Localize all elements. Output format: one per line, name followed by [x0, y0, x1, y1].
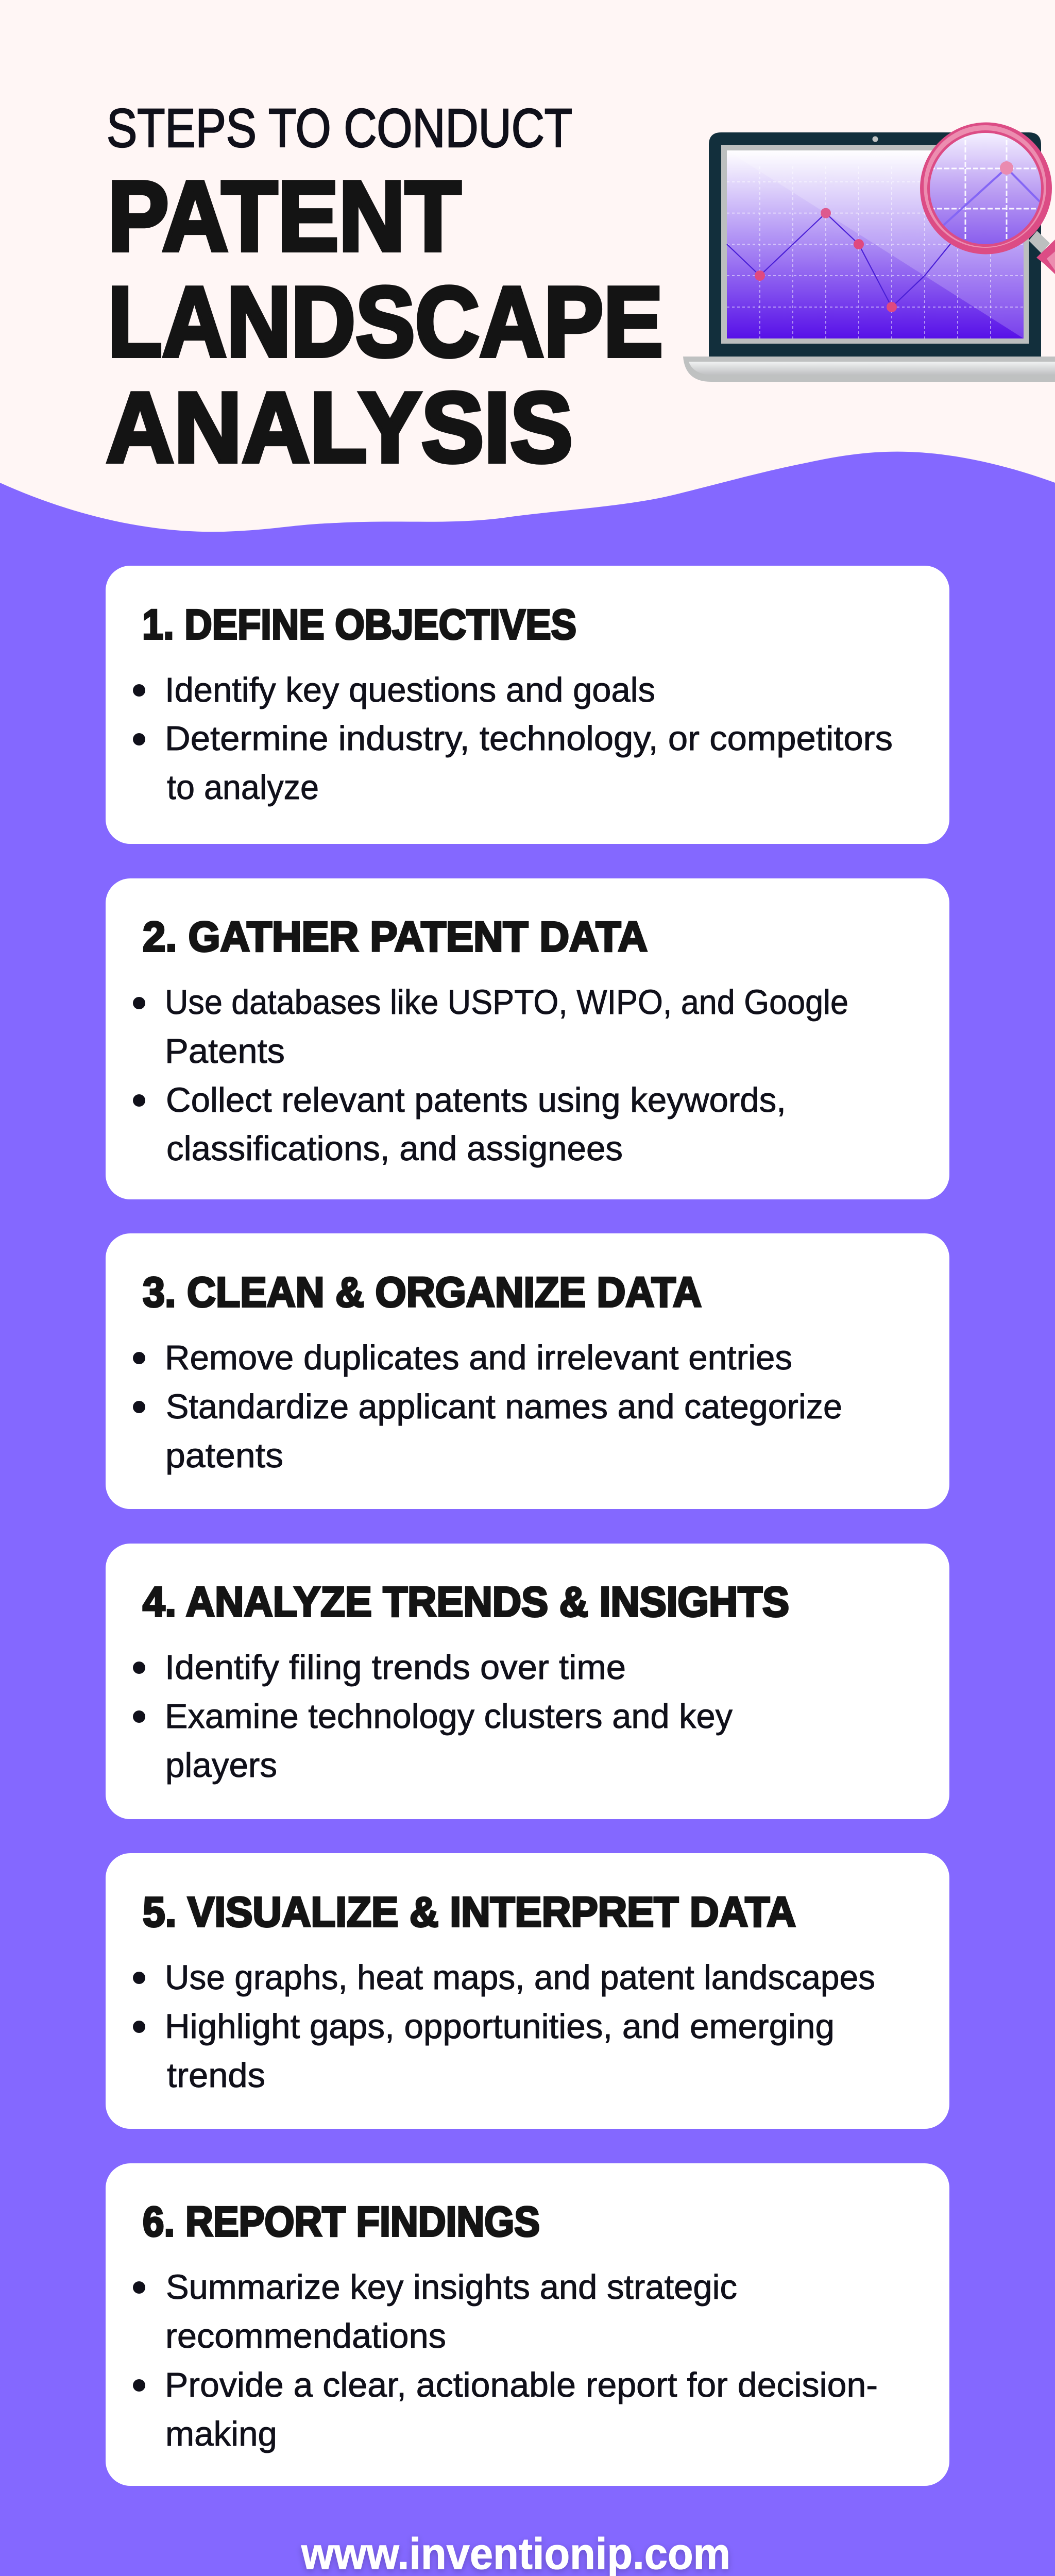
title line 2: LANDSCAPE	[108, 266, 663, 377]
panel: step 5	[106, 1853, 949, 2129]
bullet 2	[133, 719, 893, 807]
panel: step 6	[106, 2163, 949, 2486]
panel: step 3	[106, 1233, 949, 1509]
title block	[106, 98, 663, 483]
bullet 2: trends	[167, 2056, 265, 2095]
card background	[106, 1853, 949, 2129]
panel: step 2	[106, 878, 949, 1199]
bullet 2: players	[165, 1746, 277, 1785]
bullet 2	[133, 1081, 786, 1168]
bullet 2	[133, 2007, 835, 2095]
bullet 1: Identify filing trends over time	[165, 1648, 626, 1687]
bullet 1: Patents	[165, 1032, 285, 1071]
title line 1: PATENT	[108, 160, 461, 272]
bullet 1	[133, 983, 848, 1071]
screen frame	[721, 145, 1029, 344]
bullet 2: Standardize applicant names and categorize	[166, 1387, 842, 1426]
bullet 1: recommendations	[165, 2317, 446, 2355]
card background	[106, 1544, 949, 1819]
laptop body	[709, 132, 1041, 357]
card background	[106, 878, 949, 1199]
bullet 2: Examine technology clusters and key	[165, 1697, 733, 1736]
webcam	[873, 136, 878, 142]
heading: 6. REPORT FINDINGS	[143, 2198, 540, 2245]
bullet 1: Identify key questions and goals	[165, 671, 655, 709]
card background	[106, 2163, 949, 2486]
bullet 2: Highlight gaps, opportunities, and emerging	[165, 2007, 835, 2046]
bullet 2	[133, 1697, 733, 1785]
panel: step 4	[106, 1544, 949, 1819]
bullet 1: Use databases like USPTO, WIPO, and Google	[165, 983, 848, 1022]
title line 3: ANALYSIS	[106, 371, 573, 483]
bullet 2: to analyze	[167, 768, 319, 807]
bullet 2: classifications, and assignees	[166, 1129, 623, 1168]
bullet 2: Determine industry, technology, or competitors	[165, 719, 893, 758]
laptop base	[683, 357, 1055, 382]
heading: 4. ANALYZE TRENDS & INSIGHTS	[143, 1579, 789, 1625]
magnifier lens	[920, 123, 1052, 255]
heading: 1. DEFINE OBJECTIVES	[142, 601, 576, 648]
screen	[727, 150, 1024, 338]
bullet 2: Provide a clear, actionable report for decision-	[165, 2366, 878, 2404]
bullet 2	[133, 2366, 878, 2453]
bullet 2: Collect relevant patents using keywords,	[166, 1081, 786, 1120]
bullet 1	[133, 2268, 737, 2355]
panel: step 1	[106, 566, 949, 844]
heading: 2. GATHER PATENT DATA	[143, 913, 648, 960]
line chart	[727, 150, 1024, 338]
bullet 1: Summarize key insights and strategic	[166, 2268, 737, 2307]
heading: 3. CLEAN & ORGANIZE DATA	[143, 1269, 702, 1316]
bullet 2: making	[165, 2415, 277, 2453]
bullet 2	[133, 1387, 842, 1475]
subtitle: STEPS TO CONDUCT	[107, 98, 572, 159]
bullet 1: Remove duplicates and irrelevant entries	[165, 1338, 792, 1377]
icon: laptop with line chart and magnifying glass	[683, 123, 1055, 382]
magnifier handle	[1029, 231, 1055, 274]
heading: 5. VISUALIZE & INTERPRET DATA	[143, 1889, 796, 1936]
bullet 2: patents	[165, 1436, 283, 1475]
card background	[106, 1233, 949, 1509]
card background	[106, 566, 949, 844]
bullet 1: Use graphs, heat maps, and patent landscapes	[165, 1958, 875, 1997]
